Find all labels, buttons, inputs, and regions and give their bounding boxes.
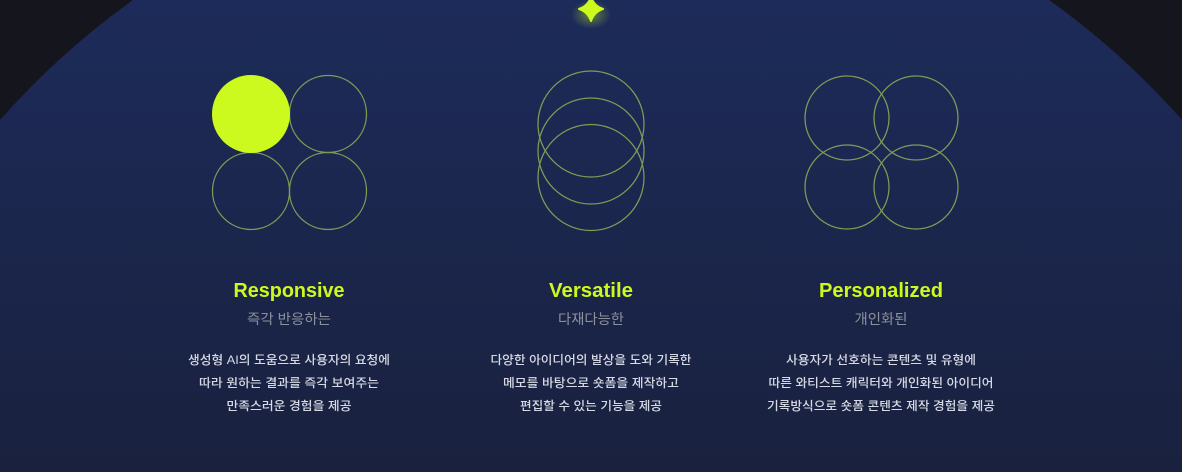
body text: versatile: 다양한 아이디어의 발상을 도와 기록한	[490, 353, 692, 367]
heading: personalized: Personalized	[819, 279, 943, 302]
icon: glowing star	[571, 0, 611, 29]
panel: responsive	[188, 75, 390, 413]
body text: responsive: 생성형 AI의 도움으로 사용자의 요청에	[188, 352, 390, 367]
body text: personalized	[767, 352, 995, 413]
heading: versatile: Versatile	[549, 279, 633, 302]
icon: three stacked overlapping circles	[538, 71, 644, 230]
heading: responsive: Responsive	[234, 279, 344, 302]
body text: responsive	[188, 352, 390, 413]
body text: versatile: 편집할 수 있는 기능을 제공	[520, 399, 662, 413]
body text: personalized: 기록방식으로 숏폼 콘텐츠 제작 경험을 제공	[767, 398, 995, 413]
body text: responsive: 만족스러운 경험을 제공	[226, 398, 352, 413]
body text: personalized: 사용자가 선호하는 콘텐츠 및 유형에	[786, 352, 976, 367]
icon: four circles with one filled	[212, 75, 366, 230]
body text: personalized: 따른 와티스트 캐릭터와 개인화된 아이디어	[768, 376, 994, 390]
body text: responsive: 따라 원하는 결과를 즉각 보여주는	[199, 376, 379, 390]
subheading: versatile: 다재다능한	[558, 311, 624, 327]
icon: four overlapping circles	[805, 76, 958, 229]
panel: personalized	[767, 76, 995, 413]
subheading: personalized: 개인화된	[854, 311, 908, 327]
panel: versatile	[490, 71, 692, 413]
body text: versatile	[490, 353, 692, 413]
subheading: responsive: 즉각 반응하는	[247, 311, 331, 327]
body text: versatile: 메모를 바탕으로 숏폼을 제작하고	[503, 376, 679, 390]
